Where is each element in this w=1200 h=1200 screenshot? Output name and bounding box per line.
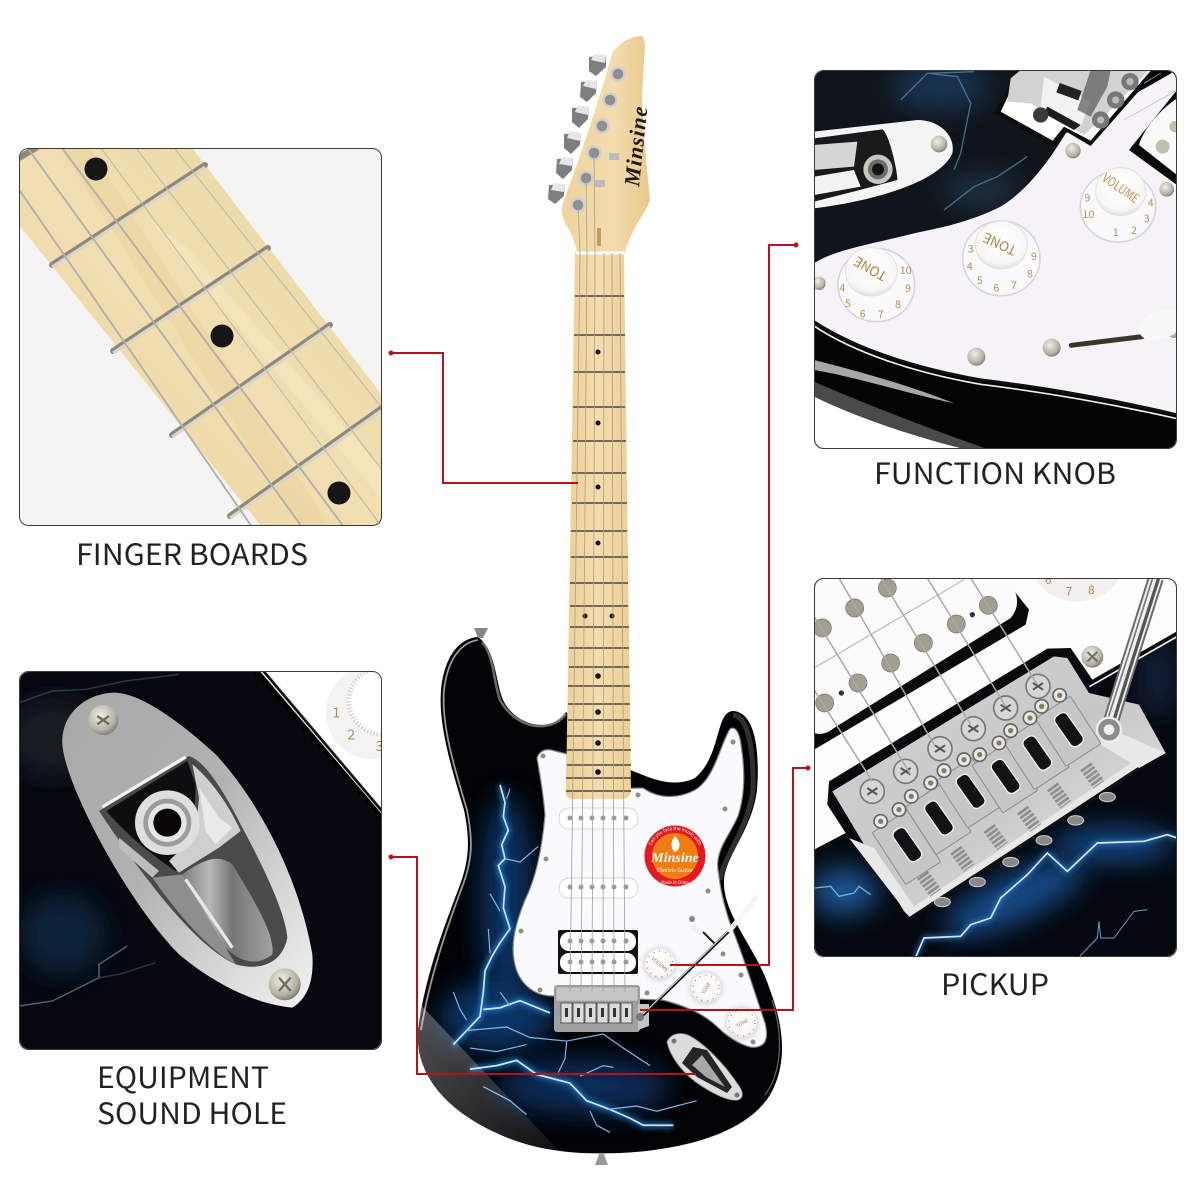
jack plate xyxy=(667,1034,742,1100)
panel: equipment sound hole photo: 1 xyxy=(332,703,340,723)
pickguard xyxy=(814,70,1177,413)
control knobs: TONE xyxy=(979,229,1019,261)
heading: equipment sound hole: EQUIPMENT xyxy=(97,1055,269,1097)
callout line: finger boards xyxy=(390,352,578,483)
control knobs: 5 xyxy=(977,273,983,288)
tone knob corner xyxy=(1036,579,1118,602)
neck pickup xyxy=(1129,90,1177,185)
orange brand sticker: Made in China xyxy=(661,880,689,886)
control knobs: TONE xyxy=(735,1017,750,1030)
pickguard screws xyxy=(518,740,756,1044)
control knobs: 10 xyxy=(900,263,912,278)
pickups xyxy=(558,808,638,974)
panel: function knob photo xyxy=(812,63,1187,449)
fret wires xyxy=(19,148,382,516)
selector switch xyxy=(689,916,716,945)
control knobs: 8 xyxy=(895,297,901,312)
pickguard xyxy=(814,578,1177,855)
control knobs: 8 xyxy=(1027,266,1033,281)
fingerboard neck xyxy=(566,252,631,799)
heading: equipment sound hole xyxy=(97,1055,287,1133)
control knobs: 3 xyxy=(968,242,974,257)
control knobs xyxy=(838,168,1156,322)
blue glow xyxy=(811,868,877,915)
headstock xyxy=(562,36,650,253)
heading: finger boards: FINGER BOARDS xyxy=(76,532,308,574)
callout line: function knob xyxy=(670,244,798,965)
headstock logo: Minsine xyxy=(619,105,652,189)
callout line: equipment sound hole xyxy=(390,856,696,1074)
bridge xyxy=(554,985,649,1032)
tuner posts xyxy=(572,68,624,212)
lightning art on body xyxy=(440,785,697,1132)
panel: pickup photo xyxy=(815,579,1176,956)
fret dots xyxy=(582,350,614,775)
faint lightning xyxy=(19,674,179,1006)
control knobs: 6 xyxy=(860,306,866,321)
heading: pickup: PICKUP xyxy=(941,962,1049,1004)
tremolo arm xyxy=(636,898,756,1021)
pickguard screw xyxy=(1081,646,1103,668)
control knobs: 4 xyxy=(839,281,845,296)
control knobs: 3 xyxy=(1144,211,1150,226)
orange brand sticker: Can you face the music with xyxy=(648,826,702,846)
panel: equipment sound hole photo: 2 xyxy=(347,724,355,744)
pickguard screws xyxy=(812,143,1178,366)
callout line: pickup xyxy=(640,766,810,1010)
panel: pickup photo: 7 xyxy=(1066,582,1073,599)
strings xyxy=(570,153,625,992)
body with lightning haze xyxy=(814,70,1067,270)
control knobs: TONE xyxy=(850,252,890,286)
orange brand sticker xyxy=(644,826,706,886)
control knobs xyxy=(644,948,758,1039)
control knobs: 9 xyxy=(905,281,911,296)
output jack plate xyxy=(814,120,953,208)
control knobs: VOLUME xyxy=(650,955,670,973)
frets xyxy=(566,296,631,791)
control knobs: TONE xyxy=(700,981,713,996)
control knobs: 10 xyxy=(1082,207,1094,222)
bolts and springs xyxy=(934,792,1115,907)
orange brand sticker: Electric Guitar xyxy=(657,866,694,874)
panel: finger boards photo xyxy=(19,148,382,527)
strings xyxy=(814,578,1037,781)
heading: equipment sound hole: SOUND HOLE xyxy=(97,1091,287,1133)
pickguard xyxy=(513,728,767,1047)
control knobs: 9 xyxy=(1084,191,1090,206)
strings xyxy=(20,148,344,527)
control knobs: 6 xyxy=(993,280,999,295)
panel: pickup photo: 6 xyxy=(1045,571,1052,588)
selector switch xyxy=(1068,328,1176,348)
pickguard corner xyxy=(252,671,382,821)
heading: function knob: FUNCTION KNOB xyxy=(874,451,1116,493)
control knobs: 7 xyxy=(878,307,884,322)
control knobs: 1 xyxy=(1113,225,1119,240)
fingerboard wood xyxy=(19,148,382,527)
tremolo arm xyxy=(1097,578,1159,742)
strap buttons xyxy=(474,628,488,638)
control knobs: 2 xyxy=(1131,223,1137,238)
intonation screws xyxy=(860,674,1050,803)
lightning xyxy=(814,835,1177,957)
panel: equipment sound hole photo: 3 xyxy=(376,736,383,756)
tremolo bridge xyxy=(994,71,1138,147)
control knobs: 4 xyxy=(967,259,973,274)
panel: equipment sound hole photo xyxy=(20,672,381,1049)
control knobs: VOLUME xyxy=(1099,168,1144,207)
control knobs: 9 xyxy=(1031,249,1037,264)
guitar illustration xyxy=(378,36,782,1165)
bottom body band xyxy=(815,439,1176,448)
body gloss reflection xyxy=(417,1003,560,1152)
humbucker pickup xyxy=(814,578,1029,750)
control knobs: 5 xyxy=(845,296,851,311)
tuner keys xyxy=(548,55,606,204)
control knobs: 4 xyxy=(1148,196,1154,211)
guitar body xyxy=(418,637,782,1153)
saddles xyxy=(872,696,1101,884)
body edge highlights xyxy=(421,640,478,1030)
orange brand sticker: Minsine xyxy=(650,851,699,866)
jack plate xyxy=(62,693,313,1008)
position dots xyxy=(84,158,108,180)
bridge plate xyxy=(832,656,1166,918)
knob xyxy=(326,666,419,759)
guitar edge highlights xyxy=(814,360,954,403)
panel: pickup photo: 8 xyxy=(1088,581,1095,598)
control knobs: 7 xyxy=(1011,278,1017,293)
